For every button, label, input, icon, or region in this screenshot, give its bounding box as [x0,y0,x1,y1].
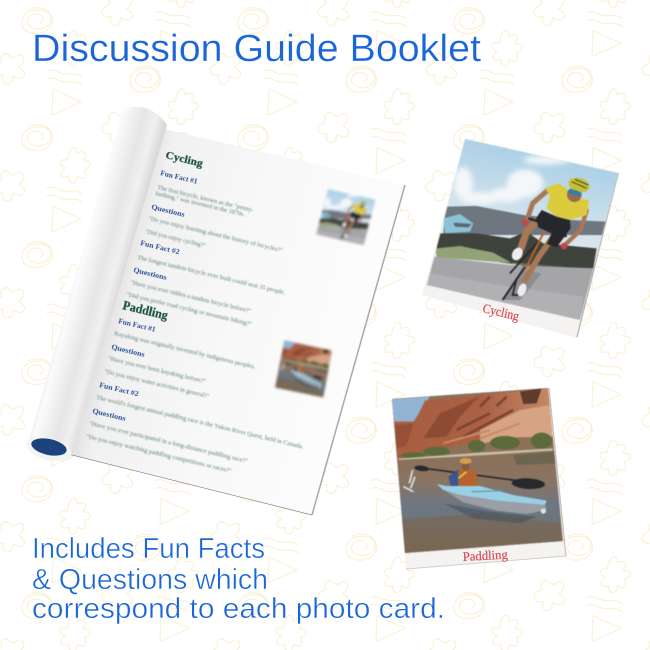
spine opening [24,433,74,465]
photo card: paddling [385,385,570,569]
section: cycling text: farthing," was invented in the 1870s. [155,190,246,219]
section: cycling text: Questions [133,265,168,282]
section: cycling text: "Did you enjoy cycling?" [145,228,207,250]
booklet [24,107,405,515]
section: paddling text: "Do you enjoy watching paddling competitions or races?" [86,433,232,475]
cycling photo [420,130,625,325]
paddling photo [385,385,570,560]
section: cycling text: Fun Fact #2 [140,238,181,256]
section: paddling text: Questions [111,342,146,359]
caption: paddling: Paddling [462,547,509,564]
bottom description [32,533,445,625]
section: cycling text: "Do you enjoy learning about the history of bicycles?" [148,215,284,254]
photo card: cycling [420,130,625,338]
section: cycling text: Fun Fact #1 [160,168,199,186]
mini photo: kayak [269,336,339,404]
bottom description: correspond to each photo card. [32,593,445,625]
icon: blue spine hole [30,435,68,459]
section: paddling text: "Have you ever been kayaking before?" [108,355,207,385]
bottom description: Includes Fun Facts [32,533,265,565]
section: cycling text: Cycling [164,149,205,170]
section: cycling text: The longest tandem bicycle ever built could seat 35 people. [137,254,286,297]
section: paddling text [86,297,305,475]
section: cycling text: "Have you ever ridden a tandem bicycle before?" [130,279,252,315]
caption: cycling: Cycling [481,300,521,324]
mini photo: cyclist [314,186,378,247]
section: paddling text: Kayaking was originally invented by indigenous peoples. [114,330,257,371]
section: paddling text: The world's longest annual paddling race is the Yukon River Quest, held in Canada. [96,394,305,451]
section: paddling text: Fun Fact #2 [99,380,140,398]
section: paddling text: Questions [92,406,127,423]
section: cycling text: Questions [151,202,186,219]
section: paddling text: Fun Fact #1 [118,316,157,334]
section: paddling text: "Have you ever participated in a long-distance paddling race?" [89,420,249,465]
booklet rolled spine [24,107,167,465]
section: cycling text: "Did you prefer road cycling or mountain biking?" [126,291,253,328]
bottom description: & Questions which [32,564,268,596]
section: paddling text: "Do you enjoy water activities in general?" [104,368,211,400]
section: cycling text [126,149,286,328]
title: Discussion Guide Booklet [32,28,481,70]
section: cycling text: The first bicycle, known as the "penny- [157,184,254,214]
booklet page [60,128,405,515]
section: paddling text: Paddling [121,297,170,323]
